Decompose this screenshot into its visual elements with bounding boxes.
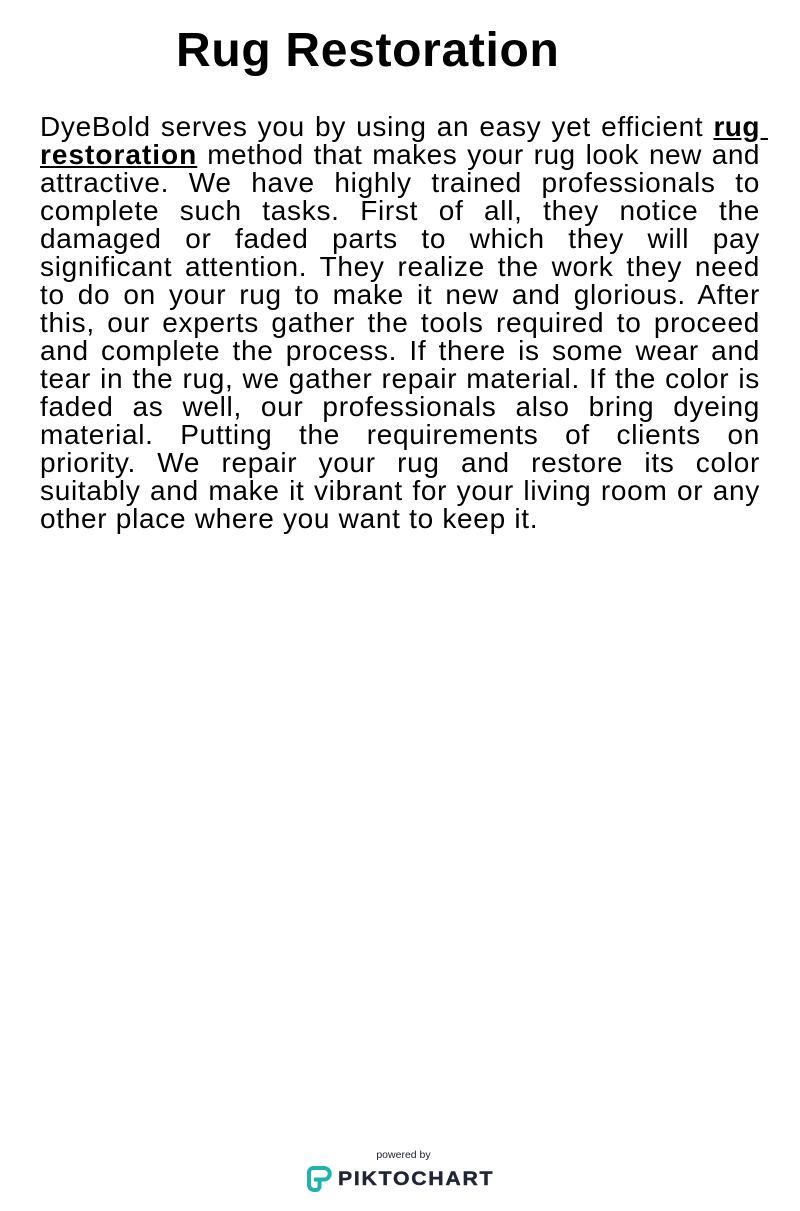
text block: rug restoration description: faded as well, our professionals also bring dyeing: [40, 391, 760, 422]
text block: rug restoration description: suitably and make it vibrant for your living room or any: [40, 475, 760, 506]
text block: rug restoration description: and complete the process. If there is some wear and: [40, 335, 760, 366]
text block: rug restoration description: attractive. We have highly trained professionals to: [40, 167, 760, 198]
text block: rug restoration description: DyeBold serves you by using an easy yet efficient rug: [40, 111, 760, 142]
text block: rug restoration description: complete such tasks. First of all, they notice the: [40, 195, 760, 226]
text block: rug restoration description: restoration method that makes your rug look new and: [40, 139, 760, 170]
text block: rug restoration description: tear in the rug, we gather repair material. If the color is: [40, 363, 760, 394]
text block: rug restoration description: this, our experts gather the tools required to proceed: [40, 307, 760, 338]
text block: rug restoration description: to do on your rug to make it new and glorious. After: [40, 279, 760, 310]
powered by label: powered by: [376, 1149, 431, 1161]
text block: rug restoration description: material. Putting the requirements of clients on: [40, 419, 760, 450]
text block: rug restoration description: [40, 111, 768, 534]
title: Rug Restoration: [176, 24, 560, 77]
icon: Piktochart mark: [309, 1168, 330, 1190]
text block: rug restoration description: other place where you want to keep it.: [40, 503, 538, 534]
text block: rug restoration description: significant attention. They realize the work they need: [40, 251, 760, 282]
text block: rug restoration description: damaged or faded parts to which they will pay: [40, 223, 760, 254]
wordmark: PIKTOCHART: [338, 1169, 493, 1190]
text block: rug restoration description: priority. We repair your rug and restore its color: [40, 447, 760, 478]
logo: Piktochart: [307, 1166, 493, 1192]
